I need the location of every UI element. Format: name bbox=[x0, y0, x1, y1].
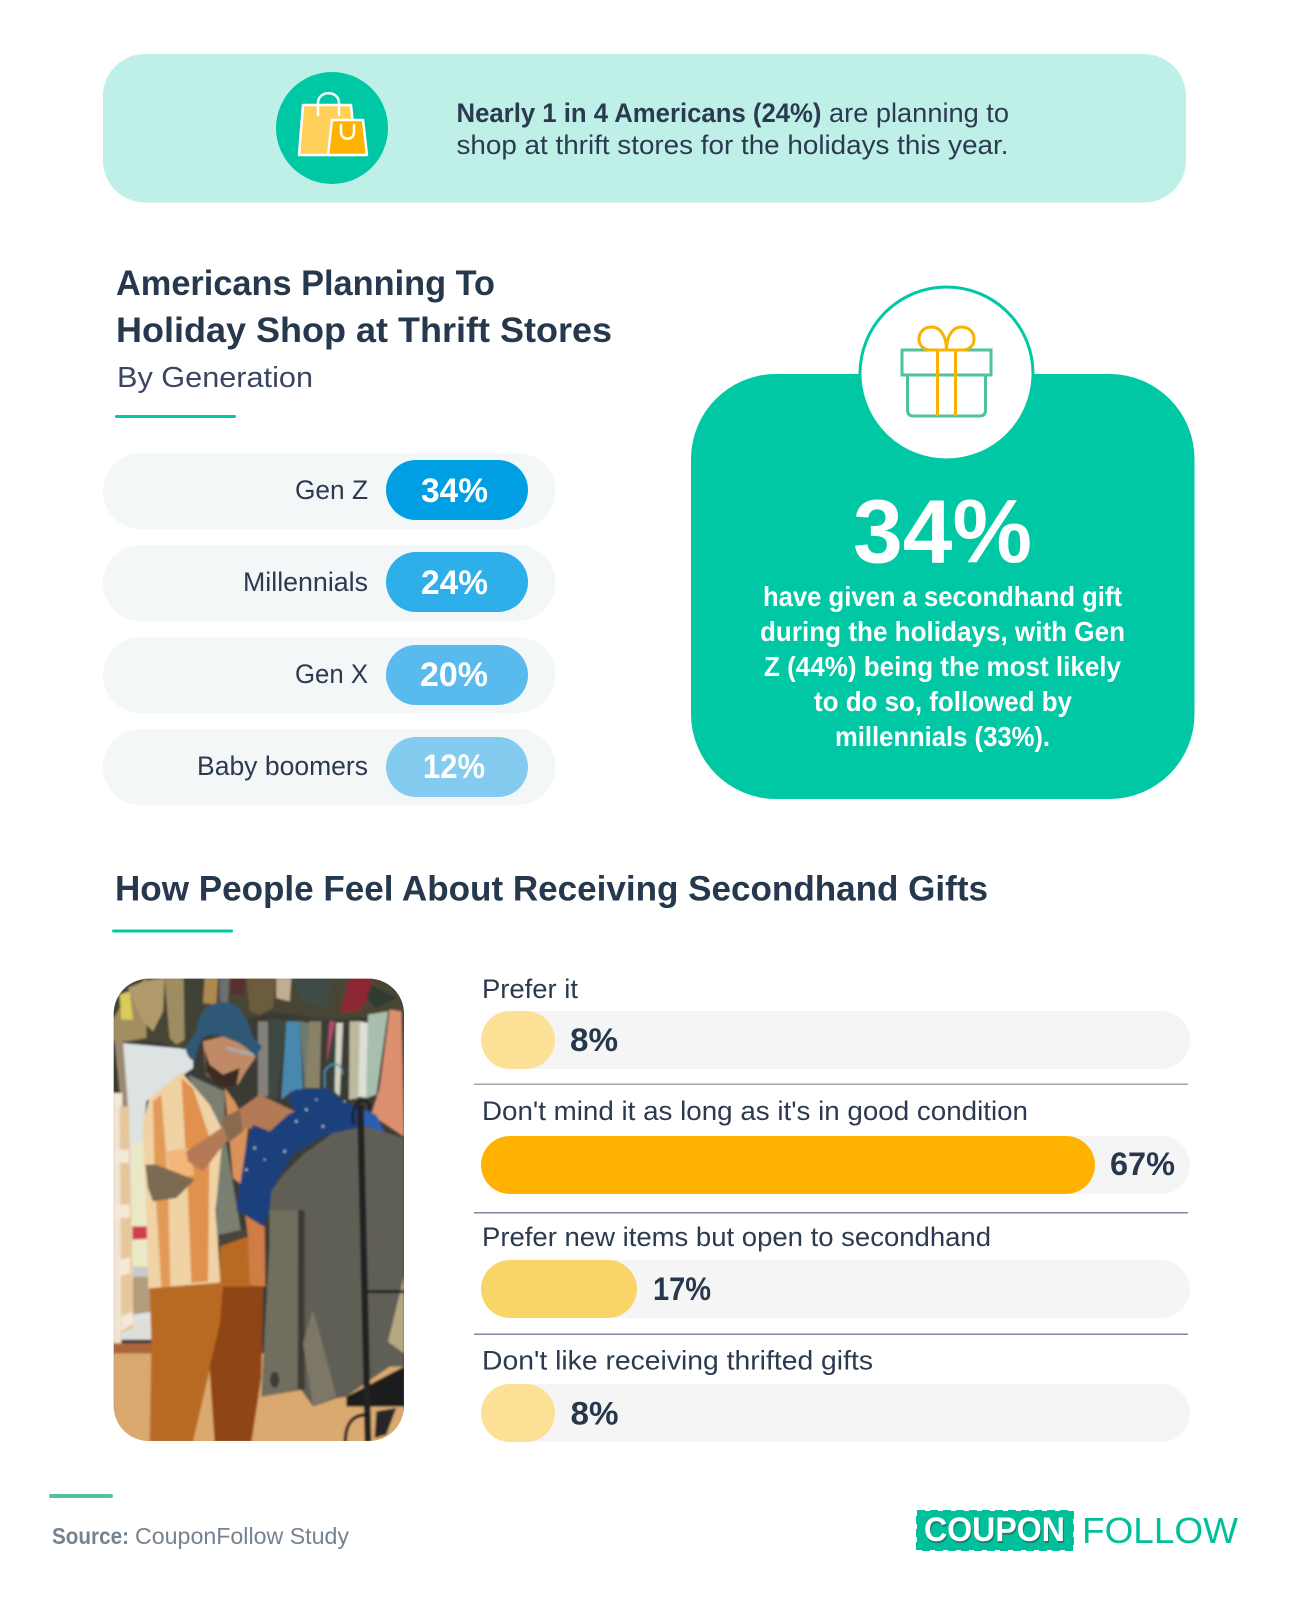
row: Millennials: Millennials bbox=[243, 567, 368, 597]
row: Millennials: 24% bbox=[421, 564, 488, 602]
row: Prefer new items bbox=[481, 1222, 1190, 1318]
heading: Americans planning to holiday shop: Americans Planning To bbox=[116, 264, 495, 303]
heading: Americans planning to holiday shop: By Generation bbox=[117, 362, 313, 394]
source note bbox=[49, 1494, 350, 1549]
row: Prefer new items: 17% bbox=[653, 1271, 711, 1307]
source note: Source: bbox=[52, 1523, 129, 1549]
heading: Americans planning to holiday shop bbox=[115, 264, 612, 418]
panel: secondhand gift stat bbox=[691, 287, 1194, 799]
stat description bbox=[760, 581, 1125, 752]
stat description: Z (44%) being the most likely bbox=[764, 651, 1121, 682]
row: Prefer it: Prefer it bbox=[482, 974, 579, 1004]
row: Prefer new items: Prefer new items but open to secondhand bbox=[482, 1222, 991, 1252]
logo: CouponFollow: COUPON bbox=[925, 1513, 1066, 1551]
logo: CouponFollow: FOLLOW bbox=[1082, 1510, 1238, 1551]
row: Don't like bbox=[481, 1346, 1190, 1442]
generation chart bbox=[103, 453, 556, 805]
callout text: Nearly 1 in 4 Americans (24%) bbox=[456, 98, 822, 128]
row: Don't like: 8% bbox=[570, 1396, 618, 1432]
row: Baby boomers bbox=[103, 729, 556, 805]
source note: CouponFollow Study bbox=[135, 1523, 350, 1549]
row: Gen X: Gen X bbox=[295, 659, 368, 689]
row: Prefer it: 8% bbox=[570, 1022, 618, 1058]
photo: man browsing thrift store rack bbox=[110, 975, 407, 1445]
row: Don't mind it: Don't mind it as long as it's in good condition bbox=[482, 1096, 1028, 1126]
row: Prefer it bbox=[481, 974, 1190, 1069]
logo: CouponFollow bbox=[917, 1510, 1238, 1551]
row: Millennials bbox=[103, 545, 556, 621]
top callout banner bbox=[103, 54, 1186, 202]
row: Baby boomers: Baby boomers bbox=[197, 751, 368, 781]
row: Don't mind it bbox=[481, 1096, 1190, 1194]
stat description: during the holidays, with Gen bbox=[760, 616, 1125, 647]
bar chart: feelings about secondhand gifts bbox=[474, 974, 1190, 1442]
row: Gen X bbox=[103, 637, 556, 713]
logo: CouponFollow: COUPON bbox=[924, 1511, 1065, 1549]
heading: Americans planning to holiday shop: Holiday Shop at Thrift Stores bbox=[116, 311, 612, 350]
row: Gen Z bbox=[103, 453, 556, 529]
stat description: millennials (33%). bbox=[835, 721, 1050, 752]
callout text: are planning to bbox=[829, 98, 1009, 128]
icon: shopping bags bbox=[276, 72, 388, 184]
callout text bbox=[456, 98, 1009, 160]
row: Don't mind it: 67% bbox=[1110, 1146, 1175, 1182]
stat description: to do so, followed by bbox=[814, 686, 1072, 717]
row: Baby boomers: 12% bbox=[423, 748, 485, 786]
stat: 34%: 34% bbox=[853, 482, 1032, 582]
heading: how people feel bbox=[112, 870, 988, 932]
heading: how people feel: How People Feel About Receiving Secondhand Gifts bbox=[115, 870, 988, 908]
icon: gift bbox=[860, 287, 1033, 460]
callout text: shop at thrift stores for the holidays this year. bbox=[456, 130, 1008, 160]
stat description: have given a secondhand gift bbox=[763, 581, 1122, 612]
row: Gen Z: 34% bbox=[421, 472, 488, 510]
row: Don't like: Don't like receiving thrifted gifts bbox=[482, 1346, 873, 1376]
row: Gen Z: Gen Z bbox=[295, 475, 368, 505]
row: Gen X: 20% bbox=[420, 656, 488, 694]
